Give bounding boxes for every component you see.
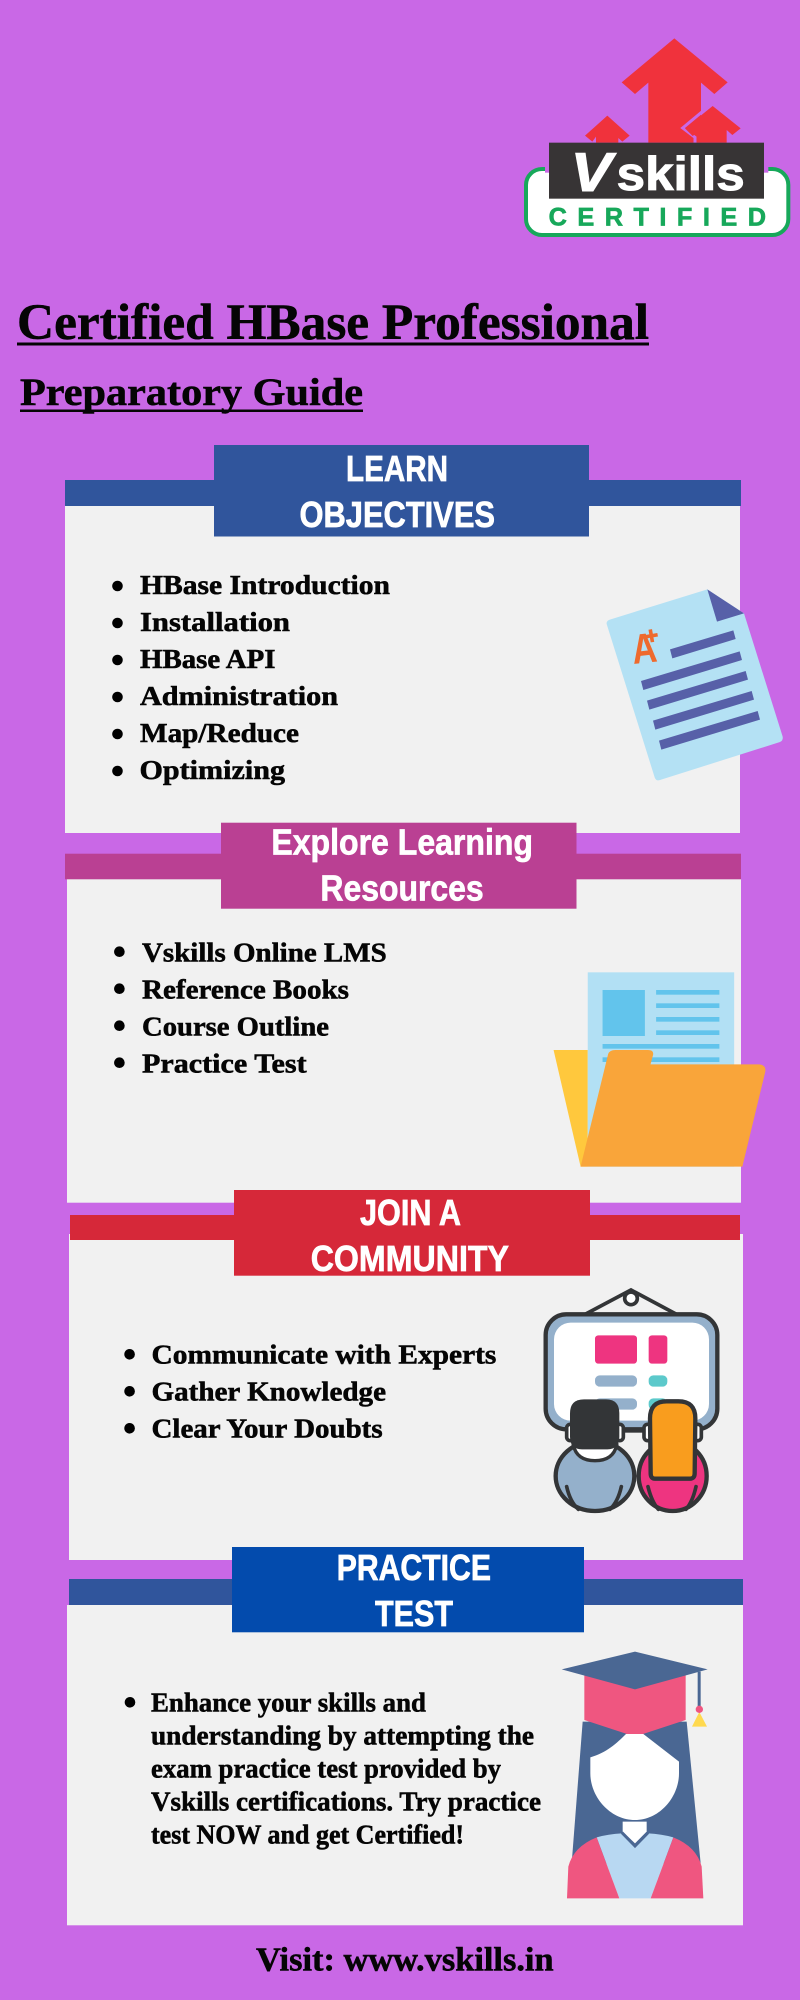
- heading band: explore learning resources: Resources: [320, 868, 484, 909]
- panel: join a community: [69, 1190, 743, 1560]
- badge: green outlined plate: [526, 165, 788, 235]
- icon: small right red arrow: [683, 105, 741, 143]
- list: community: [124, 1338, 497, 1443]
- text block: practice test description: test NOW and get Certified!: [151, 1818, 464, 1849]
- list: objectives: HBase API: [140, 643, 276, 674]
- list: objectives: Map/Reduce: [140, 717, 299, 748]
- text block: practice test description: exam practice test provided by: [151, 1753, 501, 1784]
- icon: folder with document: [554, 972, 765, 1167]
- heading band: practice test: PRACTICE: [337, 1547, 491, 1588]
- heading band: learn objectives: LEARN: [346, 448, 448, 489]
- icon: graded paper A+: +: [642, 622, 660, 650]
- icon: graded paper A+: A: [629, 624, 659, 674]
- list: objectives: Installation: [140, 606, 290, 637]
- badge: dark name plate: [549, 143, 764, 199]
- heading band: join a community: [70, 1190, 740, 1279]
- footer: visit link: Visit: www.vskills.in: [256, 1942, 554, 1979]
- list: community: Communicate with Experts: [152, 1338, 497, 1369]
- icon: small left red arrow: [585, 116, 630, 143]
- icon: big red arrow: [622, 38, 728, 143]
- subtitle: Preparatory Guide: [20, 371, 363, 414]
- list: community: Clear Your Doubts: [152, 1412, 383, 1443]
- text block: practice test description: Enhance your skills and: [151, 1687, 426, 1718]
- logo text: skills: skills: [617, 148, 745, 201]
- list: resources: Reference Books: [142, 974, 349, 1005]
- panel: explore learning resources: [65, 821, 765, 1203]
- heading band: explore learning resources: Explore Learning: [271, 821, 533, 862]
- heading band: learn objectives: OBJECTIVES: [300, 494, 495, 535]
- list: objectives: Administration: [140, 680, 338, 711]
- logo text: CERTIFIED: CERTIFIED: [549, 204, 766, 232]
- list: resources: Vskills Online LMS: [142, 937, 387, 968]
- list: resources: [114, 937, 387, 1079]
- panel: learn objectives: [65, 445, 783, 833]
- list: objectives: Optimizing: [140, 754, 285, 785]
- title: Certified HBase Professional: [17, 295, 649, 351]
- logo: Vskills Certified: [526, 38, 788, 235]
- panel: practice test: [67, 1547, 743, 1925]
- heading band: practice test: TEST: [375, 1593, 453, 1634]
- heading band: learn objectives: [65, 445, 741, 536]
- list: objectives: HBase Introduction: [140, 569, 390, 600]
- heading band: explore learning resources: [65, 821, 741, 909]
- list: objectives: [112, 569, 390, 785]
- heading band: practice test: [69, 1547, 743, 1634]
- icon: two people viewing a board: [546, 1290, 717, 1511]
- list: community: Gather Knowledge: [152, 1375, 386, 1406]
- heading band: join a community: JOIN A: [360, 1192, 461, 1233]
- logo text: V: V: [571, 142, 617, 203]
- heading band: join a community: COMMUNITY: [311, 1238, 509, 1279]
- text block: practice test description: understanding by attempting the: [151, 1719, 534, 1750]
- icon: graduate: [562, 1652, 708, 1898]
- text block: practice test description: [125, 1687, 541, 1849]
- list: resources: Practice Test: [142, 1048, 308, 1079]
- icon: graded paper A+: [607, 589, 783, 780]
- text block: practice test description: Vskills certifications. Try practice: [151, 1786, 541, 1817]
- list: resources: Course Outline: [142, 1011, 329, 1042]
